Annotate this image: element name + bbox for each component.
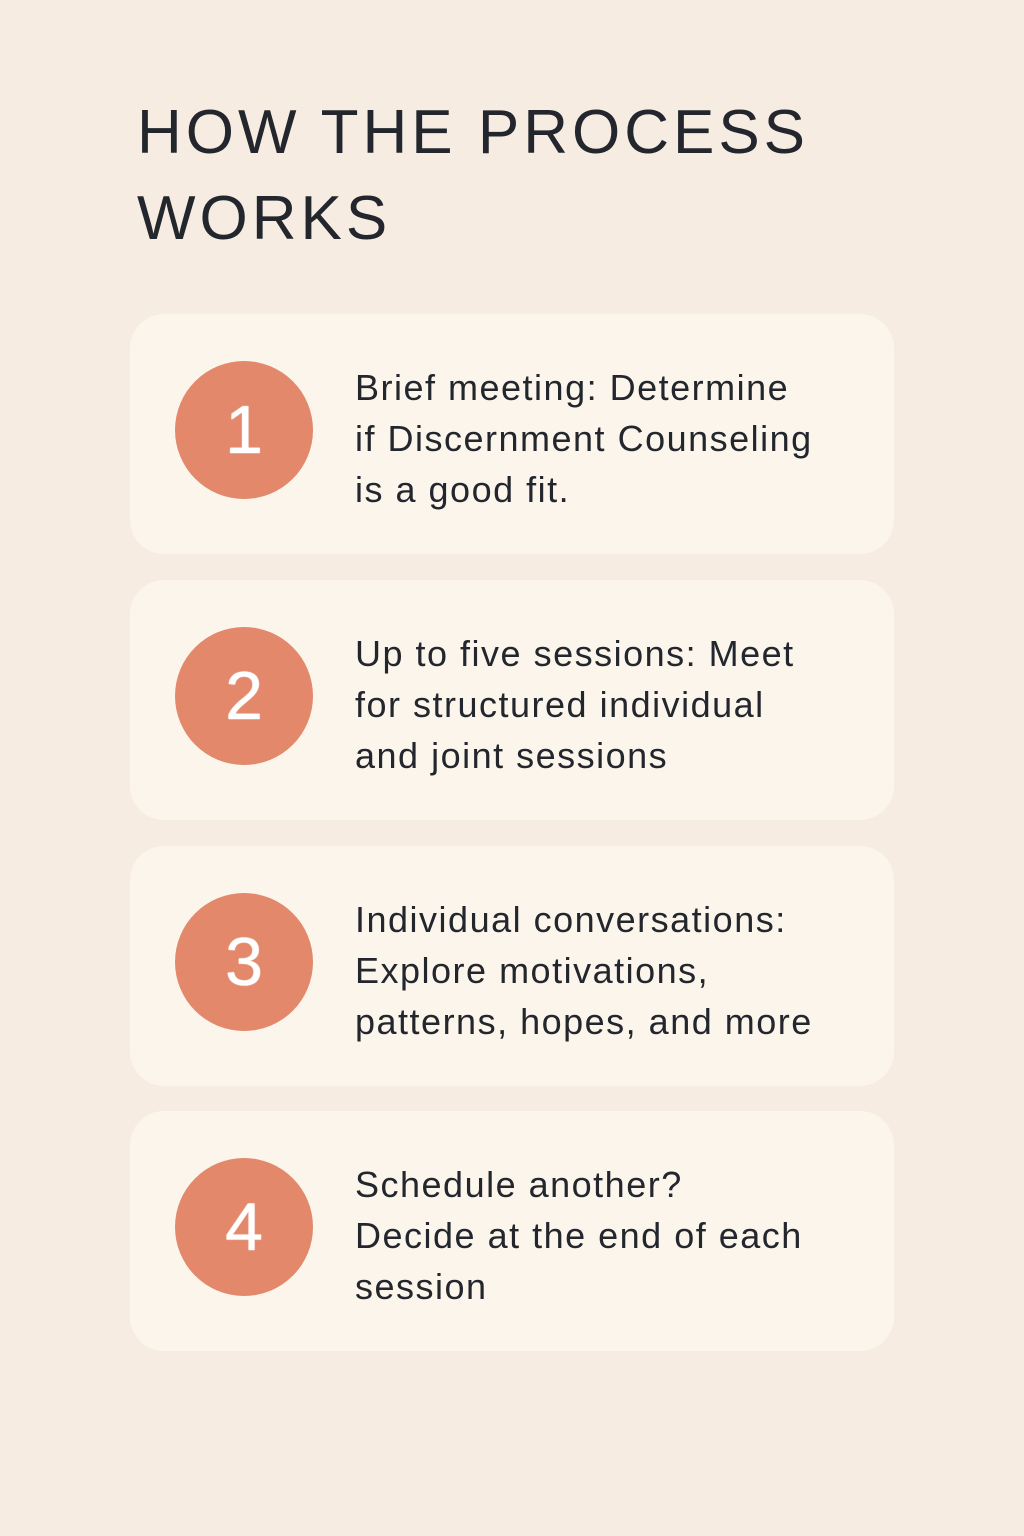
title: WORKS bbox=[137, 184, 391, 253]
text step 4: Decide at the end of each bbox=[355, 1215, 803, 1256]
text step 2: for structured individual bbox=[355, 684, 765, 725]
title: HOW THE PROCESS bbox=[137, 98, 809, 167]
text step 1: if Discernment Counseling bbox=[355, 418, 813, 459]
number 3 bbox=[175, 893, 313, 1031]
number 1 bbox=[175, 361, 313, 499]
card: step 4 bbox=[130, 1111, 894, 1351]
number 4 bbox=[175, 1158, 313, 1296]
number 1: 1 bbox=[225, 392, 263, 468]
text step 4: session bbox=[355, 1266, 488, 1307]
title bbox=[137, 98, 809, 253]
card: step 2 bbox=[130, 580, 894, 820]
text step 4 bbox=[355, 1164, 803, 1307]
text step 1: is a good fit. bbox=[355, 469, 570, 510]
text step 3: patterns, hopes, and more bbox=[355, 1001, 813, 1042]
text step 1 bbox=[355, 367, 813, 510]
number 2: 2 bbox=[225, 658, 263, 734]
text step 2: and joint sessions bbox=[355, 735, 668, 776]
text step 3: Explore motivations, bbox=[355, 950, 709, 991]
card: step 1 bbox=[130, 314, 894, 554]
text step 2 bbox=[355, 633, 795, 776]
text step 1: Brief meeting: Determine bbox=[355, 367, 789, 408]
text step 3 bbox=[355, 899, 813, 1042]
text step 2: Up to five sessions: Meet bbox=[355, 633, 795, 674]
text step 4: Schedule another? bbox=[355, 1164, 683, 1205]
number 3: 3 bbox=[225, 924, 263, 1000]
card: step 3 bbox=[130, 846, 894, 1086]
number 4: 4 bbox=[225, 1189, 263, 1265]
text step 3: Individual conversations: bbox=[355, 899, 787, 940]
number 2 bbox=[175, 627, 313, 765]
